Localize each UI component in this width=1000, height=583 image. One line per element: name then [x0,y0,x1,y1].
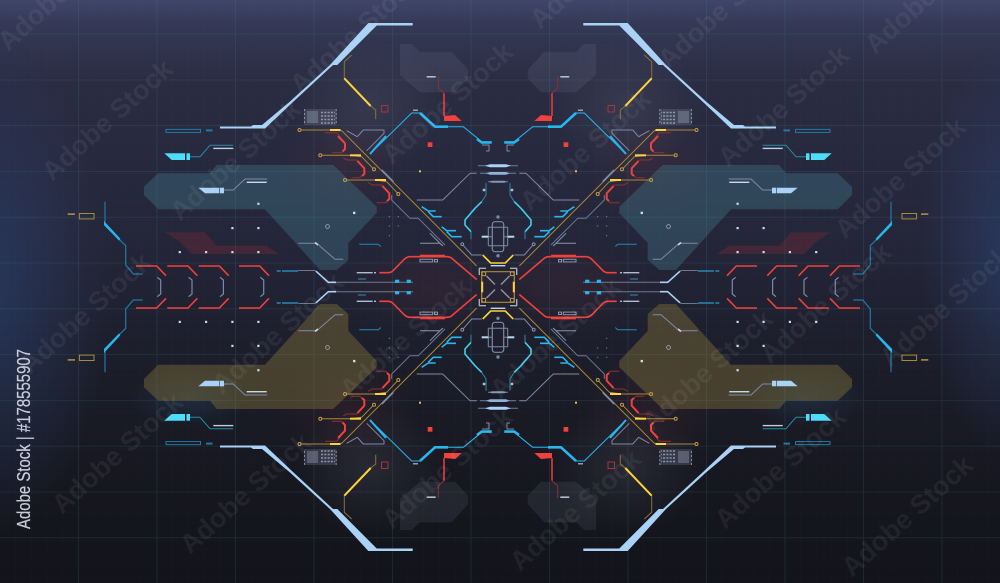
stock watermarks: Adobe Stock [504,443,647,576]
stock watermarks: Adobe Stock [376,401,519,534]
stock watermarks: Adobe Stock [754,236,897,369]
stock watermarks: Adobe Stock [484,271,627,404]
panel: teal upper right [619,165,852,270]
cyan dashes [422,207,462,237]
small ring marker [326,225,329,228]
panel: teal upper left [144,165,377,270]
red outlined square [382,106,388,112]
red filled square [428,142,432,147]
frame: large light blue angled bracket [220,23,413,128]
short cyan trace [359,244,381,246]
red brackets beside gold lines [325,133,389,203]
quadrant: lower left HUD linework (mirror) [68,287,500,551]
cyan central arc [465,183,486,239]
teal bar widget [166,129,212,132]
blue side trace [104,202,143,274]
grid dots [179,203,399,253]
red connector with flag [427,76,462,121]
central top bars [478,164,498,183]
cyan arrow tag [164,145,233,160]
stock watermarks: Adobe Stock [636,303,779,436]
grey node line [461,243,482,255]
blue data line [370,110,492,154]
stock watermarks: Adobe Stock [829,111,972,244]
quadrant: upper right HUD linework (mirror) [496,23,928,287]
centre horizontal circuit [277,270,413,283]
yellow dot [419,170,421,172]
stock watermarks: Adobe Stock [514,83,657,216]
grey branch line [298,242,343,259]
panel: grey hexagon [400,44,468,92]
light blue arrow tag [198,179,267,193]
data thumbnail grid [304,109,337,125]
panel: red parallelogram right [717,232,831,254]
grey diagonal circuits [382,170,477,246]
stock watermarks: Adobe Stock [206,266,349,399]
grey polyline [347,130,384,151]
panel: red parallelogram left [165,232,279,254]
central capsule [482,215,500,257]
stock watermarks: Adobe Stock [46,386,189,519]
stock watermarks: Adobe Stock [709,401,852,534]
stock watermarks: Adobe Stock [334,271,477,404]
quadrant: upper left HUD linework [68,23,500,287]
yellow chevron [483,255,498,266]
quadrant: lower right HUD linework (mirror) [496,287,928,551]
red hexagon brackets [136,266,269,287]
stock watermarks: Adobe Stock [174,426,317,559]
centre square [479,268,498,287]
panel: olive lower left [144,304,377,409]
stock watermarks: Adobe Stock [376,36,519,169]
gold connector lines with nodes [298,128,477,266]
stock watermarks: Adobe Stock [712,39,855,172]
stock watermarks: Adobe Stock [36,53,179,186]
stock watermarks: Adobe Stock [836,449,979,582]
yellow angled line [344,55,376,119]
red central trace [357,255,477,280]
gold tag [68,213,94,219]
stock watermarks: Adobe Stock [164,93,307,226]
stock id caption: Adobe Stock | #178555907 [14,349,34,529]
panel: olive lower right [619,304,852,409]
stock watermarks: Adobe Stock [14,246,157,379]
